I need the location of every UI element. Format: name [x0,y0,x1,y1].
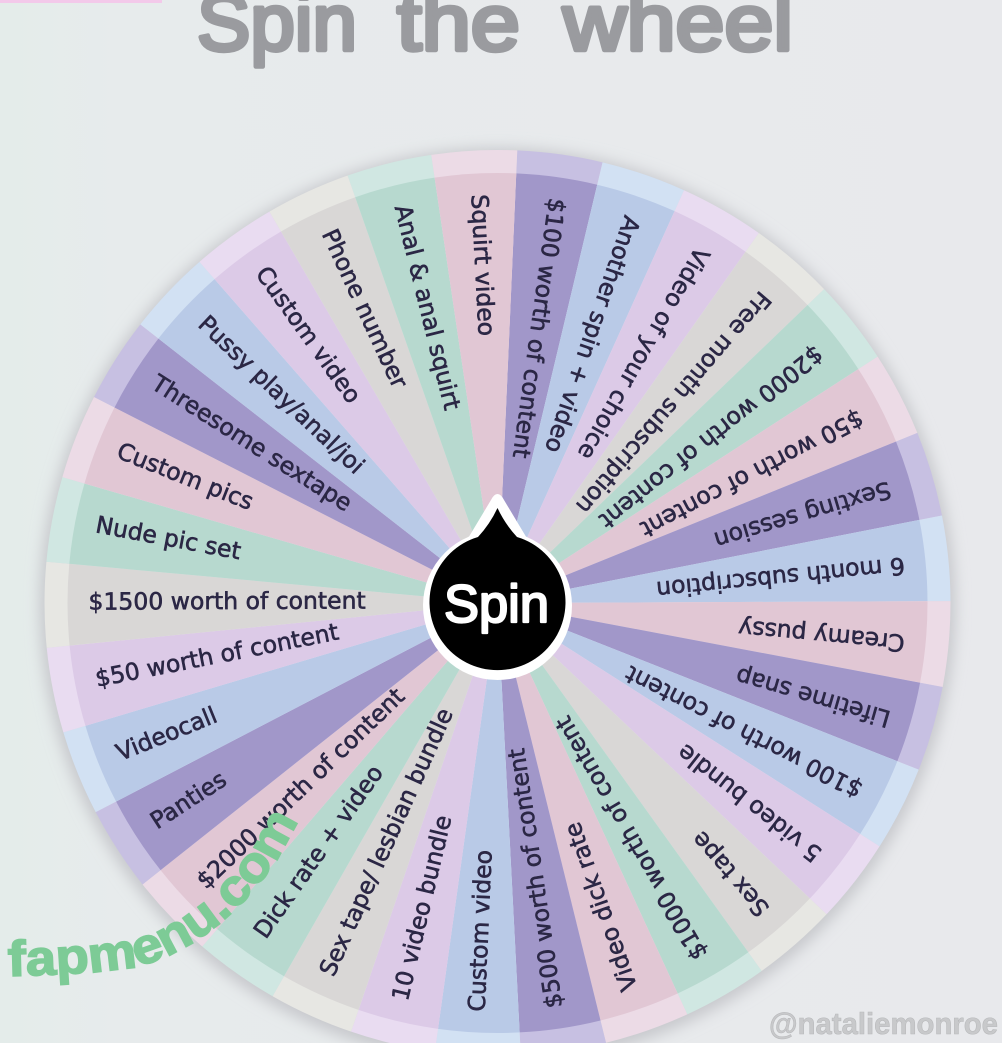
segment: Sexting session [498,433,950,682]
segment: Video dick rate: Video dick rate [558,819,643,995]
segment: Nude pic set: Nude pic set [94,510,243,565]
watermark: fapmenu.com: fapmenu.com [8,812,298,986]
segment: $50 worth of content [39,521,498,732]
segment: Pussy play/anal/joi: Pussy play/anal/joi [193,310,370,480]
segment: Video of your choice [498,190,762,638]
wheel shadow [40,148,956,1043]
segment: Creamy pussy [498,601,951,689]
segment: Custom video [199,205,562,603]
segment: $500 worth of content: $500 worth of content [502,747,568,1010]
segment: Videocall [56,527,498,812]
segment: Nude pic set [46,476,505,603]
segment: Video of your choice: Video of your choice [572,243,715,465]
segment: Custom video [412,603,521,1043]
segment: Pussy play/anal/joi [140,257,550,603]
segment: Sex tape/ lesbian bundle [270,575,498,1032]
segment: Sex tape [439,603,827,977]
segment: Video dick rate [420,603,687,1043]
segment: Lifetime snap: Lifetime snap [733,662,893,733]
segment: Anal & anal squirt [348,147,578,603]
segment: $1500 worth of content: $1500 worth of content [88,587,366,616]
segment: Custom video: Custom video [250,261,367,409]
segment: Threesome sextape: Threesome sextape [146,368,357,517]
segment: $100 worth of content: $100 worth of content [621,660,867,804]
segment: Another spin + video: Another spin + video [539,212,646,457]
segment: $1000 worth of content [428,603,762,1021]
segment: $50 worth of content: $50 worth of content [636,404,868,543]
segment: $2000 worth of content [498,289,884,665]
segment: Dick rate + video: Dick rate + video [248,760,389,943]
segment: Squirt video [431,142,582,603]
spin button [423,494,572,680]
segment: Squirt video: Squirt video [465,194,501,337]
segment: $1500 worth of content [38,518,498,648]
segment: 10 video bundle: 10 video bundle [386,812,457,1003]
segment: Sex tape/ lesbian bundle: Sex tape/ lesbian bundle [314,704,459,980]
segment: Free month subscription [498,233,829,652]
segment: Free month subscription: Free month subscription [570,286,777,520]
segment: Videocall: Videocall [112,701,221,767]
title [197,0,793,67]
segment: Panties: Panties [145,765,232,835]
segment: Creamy pussy: Creamy pussy [737,614,906,657]
segment: 5 video bundle: 5 video bundle [672,738,827,868]
segment: $50 worth of content: $50 worth of content [93,618,341,693]
segment: $100 worth of content [498,150,603,607]
segment: 10 video bundle [350,591,498,1043]
segment: Dick rate + video [198,560,498,996]
segment: $500 worth of content [414,603,606,1043]
spin button: Spin [444,575,549,634]
segment: $2000 worth of content: $2000 worth of content [594,340,829,534]
segment: Lifetime snap [482,603,943,771]
segment: $50 worth of content [498,357,924,675]
segment: 6 month subscription [498,515,959,687]
segment: Custom video: Custom video [463,849,498,1012]
segment: 5 video bundle [451,603,880,919]
segment: Anal & anal squirt: Anal & anal squirt [389,202,466,413]
segment: $2000 worth of content [137,547,498,947]
segment: Another spin + video [498,162,686,623]
segment: $1000 worth of content: $1000 worth of content [549,711,713,965]
segment: $100 worth of content [466,603,919,849]
segment: $2000 worth of content: $2000 worth of content [191,682,410,894]
segment: Custom pics: Custom pics [113,437,257,516]
segment: Custom pics [62,395,521,603]
segment: Phone number [269,168,572,603]
segment: Sex tape: Sex tape [686,826,775,922]
spin wheel [38,142,959,1043]
segment: Threesome sextape [94,321,536,603]
segment: 6 month subscription: 6 month subscription [655,552,906,604]
segment: Panties [89,536,498,884]
segment: Phone number: Phone number [316,225,414,393]
segment: Sexting session: Sexting session [711,476,894,555]
segment: $100 worth of content: $100 worth of content [507,196,571,460]
